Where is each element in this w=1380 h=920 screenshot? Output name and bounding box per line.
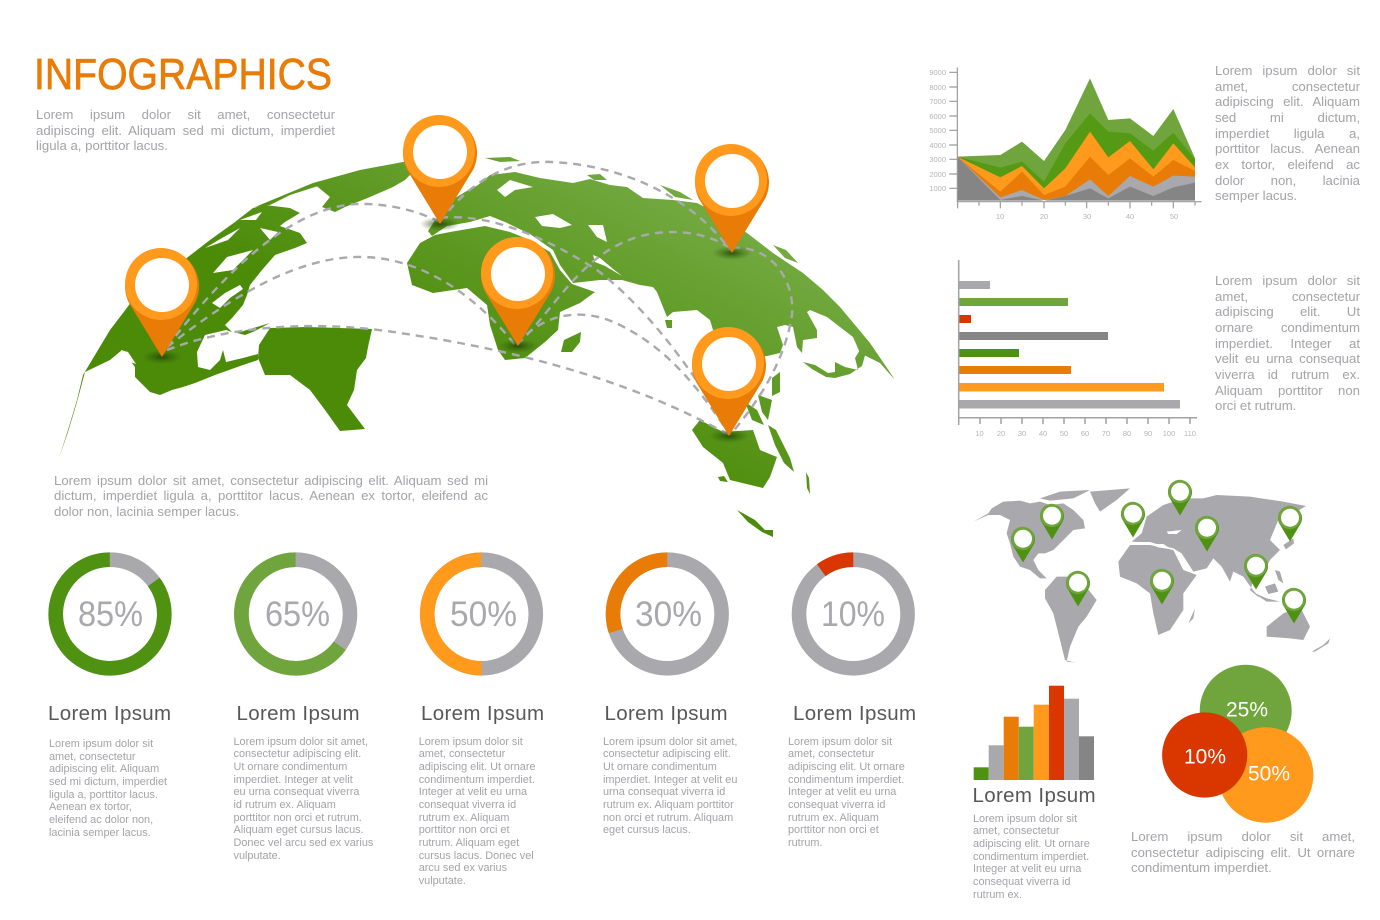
- donut chart 10%: [777, 538, 929, 690]
- bar chart description: amet, consectetur: [1215, 289, 1360, 304]
- text block 2: vulputate.: [234, 850, 281, 862]
- text block 3: arcu sed ex varius: [419, 862, 507, 874]
- text block 1: adipiscing elit. Aliquam: [49, 763, 159, 775]
- curved world map: [59, 157, 895, 537]
- text block 4: Lorem ipsum dolor sit amet,: [603, 736, 737, 748]
- bar chart description: [1215, 273, 1360, 413]
- area chart description: adipiscing elit. Aliquam: [1215, 94, 1360, 109]
- area chart: 40: [1126, 212, 1134, 221]
- area chart: 5000: [929, 126, 946, 135]
- area chart: 7000: [929, 97, 946, 106]
- text block 3: Integer at velit eu urna: [419, 786, 527, 798]
- text block 5: rutrum ex. Aliquam: [788, 812, 879, 824]
- text block 3: consequat viverra id: [419, 799, 516, 811]
- circles description: consectetur adipiscing elit. Ut ornare: [1131, 845, 1355, 860]
- text block 5: Lorem ipsum dolor sit: [788, 736, 892, 748]
- text block 1: amet, consectetur: [49, 751, 136, 763]
- donut chart 65%: 65%: [265, 595, 330, 634]
- area chart: 30: [1083, 212, 1091, 221]
- area chart: 8000: [929, 83, 946, 92]
- text block 3: amet, consectetur: [419, 748, 505, 760]
- area chart: 50: [1170, 212, 1178, 221]
- text block 3: vulputate.: [419, 875, 466, 887]
- intro text: [36, 107, 335, 153]
- area chart description: dolor non, lacinia: [1215, 173, 1360, 188]
- horizontal bar chart: 60: [1081, 429, 1089, 438]
- heading 6: Lorem Ipsum: [972, 784, 1096, 807]
- map caption text: dictum, imperdiet ligula a, porttitor lacus. Aenean ex tortor, eleifend ac: [54, 488, 488, 503]
- map caption text: [54, 472, 488, 519]
- area chart description: amet, consectetur: [1215, 79, 1360, 94]
- horizontal bar chart: [959, 260, 1197, 438]
- text block 6: adipiscing elit. Ut ornare: [973, 838, 1090, 850]
- title: INFOGRAPHICS: [34, 50, 332, 99]
- map caption text: dolor non, lacinia semper lacus.: [54, 504, 239, 519]
- text block 3: Lorem ipsum dolor sit: [419, 736, 523, 748]
- area chart: 20: [1040, 212, 1048, 221]
- area chart: 1000: [929, 184, 946, 193]
- text block 4: Ut ornare condimentum: [603, 761, 717, 773]
- text block 2: Aliquam eget cursus lacus.: [234, 824, 364, 836]
- intro text: ligula a, porttitor lacus.: [36, 138, 168, 153]
- text block 1: sed mi dictum, imperdiet: [49, 776, 167, 788]
- icon: green pin 5: [1168, 480, 1192, 516]
- icon: map pin Russia: [695, 144, 769, 260]
- overlapping percentage circles: 25%: [1226, 698, 1268, 722]
- heading 1: Lorem Ipsum: [48, 702, 171, 725]
- text block 2: consectetur adipiscing elit.: [234, 748, 361, 760]
- bar chart description: Lorem ipsum dolor sit: [1215, 273, 1360, 288]
- text block 3: adipiscing elit. Ut ornare: [419, 761, 536, 773]
- text block 4: non orci et rutrum. Aliquam: [603, 812, 733, 824]
- text block 2: eu urna consequat viverra: [234, 786, 359, 798]
- donut chart 85%: 85%: [78, 595, 143, 634]
- area chart: 9000: [929, 68, 946, 77]
- icon: green pin 10: [1282, 588, 1306, 624]
- text block 2: imperdiet. Integer at velit: [234, 774, 353, 786]
- horizontal bar chart: 40: [1039, 429, 1047, 438]
- text block 1: lacinia semper lacus.: [49, 827, 151, 839]
- text block 2: [234, 736, 373, 862]
- small grey world map: [973, 488, 1330, 663]
- area chart: 3000: [929, 155, 946, 164]
- text block 2: Ut ornare condimentum: [234, 761, 347, 773]
- dashed flight routes: [167, 162, 792, 435]
- text block 4: imperdiet. Integer at velit eu: [603, 774, 737, 786]
- text block 5: adipiscing elit. Ut ornare: [788, 761, 905, 773]
- map caption text: Lorem ipsum dolor sit amet, consectetur adipiscing elit. Aliquam sed mi: [54, 472, 488, 488]
- bar chart description: adipiscing elit. Ut: [1215, 304, 1360, 319]
- area chart description: sed mi dictum,: [1215, 110, 1360, 125]
- donut chart 10%: 10%: [821, 595, 885, 634]
- text block 3: condimentum imperdiet.: [419, 774, 535, 786]
- text block 5: amet, consectetur: [788, 748, 875, 760]
- bar chart description: orci et rutrum.: [1215, 398, 1296, 413]
- overlapping percentage circles: 50%: [1248, 762, 1290, 786]
- intro text: adipiscing elit. Aliquam sed mi dictum, imperdiet: [36, 123, 335, 138]
- horizontal bar chart: 20: [997, 429, 1005, 438]
- donut chart 85%: [34, 538, 186, 690]
- horizontal bar chart: 70: [1102, 429, 1110, 438]
- small column chart: [974, 686, 1094, 780]
- text block 6: condimentum imperdiet.: [973, 851, 1089, 863]
- text block 4: urna consequat viverra id: [603, 786, 725, 798]
- bar chart description: velit eu urna consequat: [1215, 351, 1360, 366]
- area chart: 4000: [929, 141, 946, 150]
- horizontal bar chart: 110: [1184, 429, 1196, 438]
- text block 2: porttitor non orci et rutrum.: [234, 812, 362, 824]
- text block 6: consequat viverra id: [973, 876, 1070, 888]
- overlapping percentage circles: 10%: [1184, 746, 1226, 768]
- bar chart description: imperdiet. Integer at: [1215, 336, 1360, 351]
- inland seas and coastal gaps: [121, 180, 622, 364]
- text block 6: amet, consectetur: [973, 825, 1060, 837]
- circles description: [1131, 829, 1355, 875]
- donut chart 30%: [599, 546, 736, 682]
- text block 1: ligula a, porttitor lacus.: [49, 789, 158, 801]
- text block 1: Lorem ipsum dolor sit: [49, 738, 153, 750]
- horizontal bar chart: 90: [1144, 429, 1152, 438]
- area chart description: Lorem ipsum dolor sit: [1215, 63, 1360, 78]
- text block 5: condimentum imperdiet.: [788, 774, 904, 786]
- donut chart 50%: [427, 560, 536, 668]
- donut chart 65%: [220, 538, 372, 690]
- text block 4: eget cursus lacus.: [603, 824, 691, 836]
- icon: map pin Europe: [403, 115, 477, 231]
- donut chart 30%: 30%: [635, 595, 702, 634]
- text block 5: Integer at velit eu urna: [788, 786, 896, 798]
- area chart: [929, 67, 1202, 221]
- horizontal bar chart: 30: [1018, 429, 1026, 438]
- icon: green pin 1: [1040, 504, 1064, 540]
- text block 2: Donec vel arcu sed ex varius: [234, 837, 373, 849]
- horizontal bar chart: 50: [1060, 429, 1068, 438]
- text block 6: rutrum ex.: [973, 889, 1022, 901]
- heading 2: Lorem Ipsum: [236, 702, 360, 725]
- area chart description: ex tortor, eleifend ac: [1215, 157, 1360, 172]
- area chart: 6000: [929, 112, 946, 121]
- overlapping percentage circles: [1162, 665, 1313, 823]
- heading 4: Lorem Ipsum: [604, 702, 728, 725]
- continents: [59, 157, 895, 537]
- text block 1: Aenean ex tortor,: [49, 801, 132, 813]
- text block 5: rutrum.: [788, 837, 822, 849]
- horizontal bar chart: 10: [975, 429, 984, 438]
- area chart description: semper lacus.: [1215, 188, 1297, 203]
- text block 4: [603, 736, 737, 836]
- icon: map pin Africa: [481, 237, 555, 353]
- area chart description: [1215, 63, 1360, 203]
- area chart description: porttitor lacus. Aenean: [1215, 141, 1360, 156]
- text block 6: Lorem ipsum dolor sit: [973, 812, 1077, 824]
- bar chart description: ornare condimentum: [1215, 320, 1360, 335]
- text block 5: [788, 736, 905, 849]
- circles description: Lorem ipsum dolor sit amet,: [1131, 829, 1355, 844]
- horizontal bar chart: 80: [1123, 429, 1131, 438]
- text block 2: Lorem ipsum dolor sit amet,: [234, 736, 368, 748]
- text block 6: Integer at velit eu urna: [973, 863, 1081, 875]
- icon: green pin 8: [1278, 506, 1302, 542]
- text block 5: porttitor non orci et: [788, 824, 879, 836]
- text block 1: eleifend ac dolor non,: [49, 814, 153, 826]
- text block 3: [418, 736, 536, 887]
- area chart: 10: [996, 212, 1004, 221]
- text block 3: rutrum. Aliquam eget: [419, 837, 519, 849]
- icon: green pin 7: [1150, 569, 1174, 604]
- bar chart description: Aliquam porttitor non: [1215, 383, 1360, 398]
- area chart description: imperdiet ligula a,: [1215, 126, 1360, 141]
- circles description: condimentum imperdiet.: [1131, 860, 1272, 875]
- text block 3: cursus lacus. Donec vel: [419, 850, 534, 862]
- horizontal bar chart: 100: [1163, 429, 1175, 438]
- text block 6: [973, 812, 1090, 901]
- icon: green pin 4: [1121, 502, 1145, 538]
- icon: green pin 9: [1244, 554, 1268, 590]
- text block 5: consequat viverra id: [788, 799, 885, 811]
- bar chart description: viverra id rutrum ex.: [1215, 367, 1360, 382]
- heading 5: Lorem Ipsum: [793, 702, 916, 725]
- icon: map pin North America: [125, 248, 199, 364]
- text block 4: rutrum ex. Aliquam porttitor: [603, 799, 734, 811]
- heading 3: Lorem Ipsum: [421, 702, 544, 725]
- text block 3: rutrum ex. Aliquam: [419, 812, 509, 824]
- area chart: 2000: [929, 170, 946, 179]
- text block 2: id rutrum ex. Aliquam: [234, 799, 336, 811]
- text block 4: consectetur adipiscing elit.: [603, 748, 731, 760]
- icon: green pin 3: [1066, 571, 1090, 606]
- text block 3: porttitor non orci et: [419, 824, 510, 836]
- donut chart 50%: 50%: [450, 595, 517, 634]
- icon: green pin 6: [1195, 516, 1219, 552]
- icon: green pin 2: [1011, 527, 1035, 562]
- icon: map pin Australia: [692, 327, 766, 443]
- text block 1: [49, 738, 167, 839]
- intro text: Lorem ipsum dolor sit amet, consectetur: [36, 107, 335, 122]
